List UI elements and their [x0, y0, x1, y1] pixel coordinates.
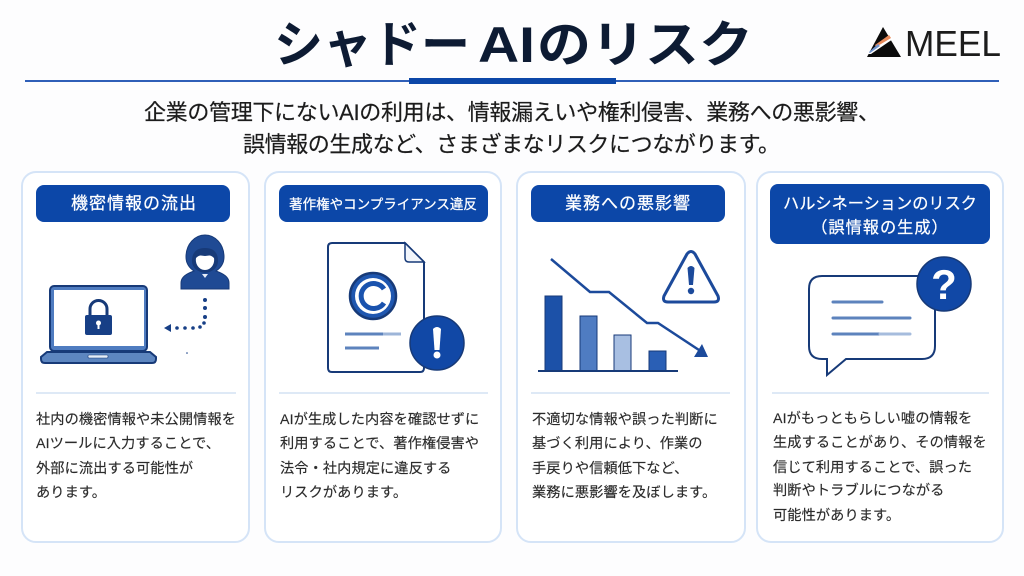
body text: 社内の機密情報や未公開情報を: [36, 412, 236, 428]
body text: 業務に悪影響を及ぼします。: [532, 485, 716, 501]
body text: 不適切な情報や誤った判断に: [532, 412, 718, 428]
icon: speech bubble: [809, 276, 935, 375]
body text: 生成することがあり、その情報を: [773, 435, 987, 451]
body text: 信じて利用することで、誤った: [773, 460, 972, 476]
body text: AIが生成した内容を確認せずに: [280, 411, 479, 428]
body text: 法令・社内規定に違反する: [280, 461, 451, 477]
heading pill: [770, 184, 990, 244]
logo: AIMEEL: MEEL: [905, 23, 1001, 64]
intro text: 企業の管理下にないAIの利用は、情報漏えいや権利侵害、業務への悪影響、: [144, 100, 880, 125]
body text: あります。: [36, 485, 106, 501]
title: シャドー: [274, 17, 470, 73]
arrow: downward trend: [551, 259, 708, 357]
arrow: dotted data flow: [164, 298, 207, 354]
title: のリスク: [537, 17, 753, 73]
body text: AIツールに入力することで、: [36, 436, 220, 452]
heading pill: 業務への悪影響: [565, 194, 691, 213]
body text: 判断やトラブルにつながる: [773, 482, 944, 499]
body text: [36, 412, 236, 501]
panel: ハルシネーションのリスク: [757, 172, 1003, 542]
icon: laptop with lock: [41, 286, 156, 363]
heading pill: 著作権やコンプライアンス違反: [289, 196, 477, 212]
chart: declining bars: [538, 296, 678, 371]
icon: question badge: [917, 257, 971, 311]
intro text: 誤情報の生成など、さまざまなリスクにつながります。: [243, 132, 780, 157]
heading pill: [36, 185, 230, 222]
body text: [532, 412, 718, 501]
panel: 著作権やコンプライアンス違反: [265, 172, 501, 542]
icon: exclamation badge: [410, 316, 464, 370]
title: AI: [478, 17, 535, 73]
icon: copyright document: [328, 243, 424, 372]
heading pill: （誤情報の生成）: [811, 219, 949, 237]
body text: AIがもっともらしい嘘の情報を: [773, 411, 972, 427]
heading pill: 機密情報の流出: [71, 194, 197, 213]
icon: question badge: ?: [931, 261, 957, 308]
body text: 外部に流出する可能性が: [36, 461, 193, 477]
body text: 手戻りや信頼低下など、: [532, 461, 688, 477]
header rule: [25, 78, 999, 84]
body text: リスクがあります。: [280, 485, 407, 501]
body text: [773, 411, 987, 524]
panel: 機密情報の流出: [22, 172, 249, 542]
panel: 業務への悪影響: [517, 172, 745, 542]
body text: 基づく利用により、作業の: [532, 435, 703, 452]
body text: 可能性があります。: [773, 508, 900, 524]
body text: [280, 411, 479, 501]
icon: hacker: [181, 235, 229, 289]
heading pill: [531, 185, 725, 222]
heading pill: [279, 185, 488, 222]
title: [274, 17, 753, 73]
heading pill: ハルシネーションのリスク: [783, 195, 977, 213]
icon: warning triangle: [664, 252, 718, 302]
intro text: [144, 100, 880, 157]
body text: 利用することで、著作権侵害や: [280, 435, 479, 452]
